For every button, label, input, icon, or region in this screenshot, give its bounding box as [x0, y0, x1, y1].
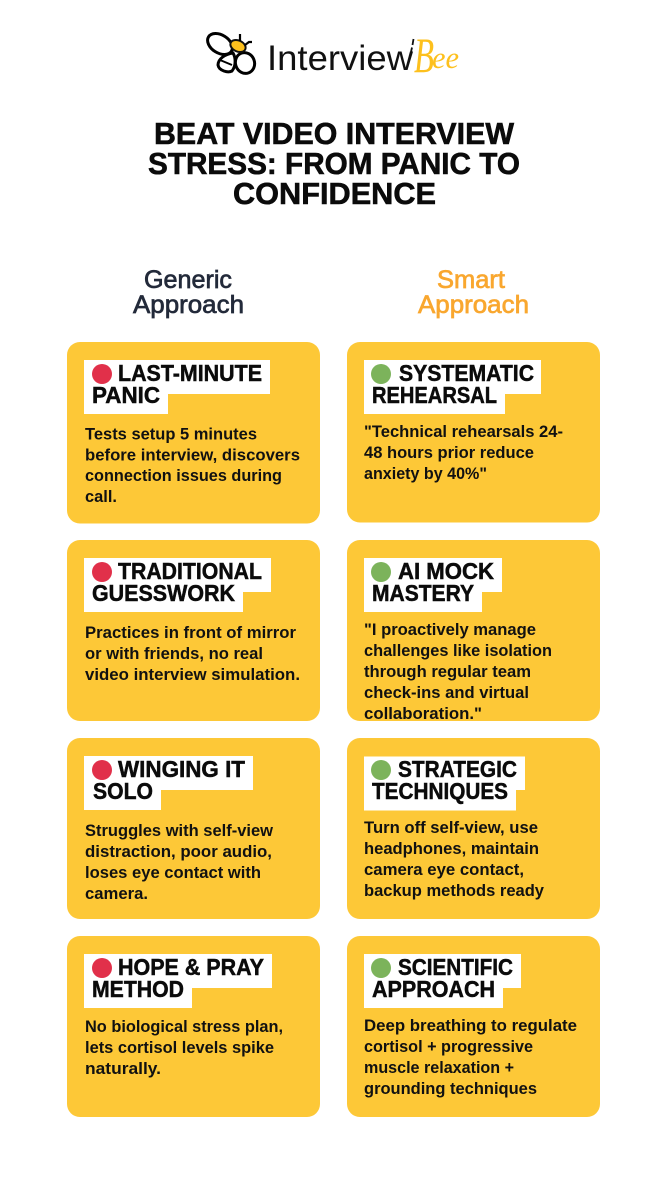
heading: generic approach: Approach	[133, 291, 244, 319]
panel: ai mock mastery: AI MOCK	[398, 558, 494, 584]
panel: hope and pray method: METHOD	[92, 976, 184, 1002]
panel: strategic techniques: backup methods ready	[364, 881, 545, 900]
panel: scientific approach: Deep breathing to regulate	[364, 1016, 577, 1035]
panel: ai mock mastery	[347, 540, 600, 723]
panel: last-minute panic: connection issues during	[85, 466, 282, 485]
panel: winging it solo: Struggles with self-view	[85, 821, 274, 840]
panel: traditional guesswork	[67, 540, 320, 721]
panel: scientific approach: muscle relaxation +	[364, 1058, 514, 1077]
panel: winging it solo	[67, 738, 320, 919]
title: CONFIDENCE	[233, 176, 436, 211]
panel: hope and pray method	[67, 936, 320, 1117]
panel: last-minute panic: LAST-MINUTE	[118, 360, 262, 386]
icon: green dot	[371, 364, 391, 384]
panel: systematic rehearsal: anxiety by 40%"	[364, 464, 487, 483]
wordmark accent: pen nib	[411, 39, 414, 52]
panel: traditional guesswork: or with friends, no real	[85, 644, 263, 663]
panel: winging it solo: SOLO	[93, 778, 153, 804]
wordmark script: B	[414, 27, 434, 83]
panel: hope and pray method: lets cortisol levels spike	[85, 1038, 274, 1057]
panel: strategic techniques: STRATEGIC	[398, 756, 517, 782]
title: STRESS: FROM PANIC TO	[148, 146, 520, 181]
heading: smart approach: Smart	[437, 266, 505, 294]
panel: strategic techniques: Turn off self-view, use	[364, 818, 538, 837]
title: BEAT VIDEO INTERVIEW	[154, 116, 515, 151]
panel: last-minute panic	[67, 342, 320, 524]
panel: ai mock mastery: collaboration."	[364, 704, 482, 723]
panel: strategic techniques: camera eye contact,	[364, 860, 524, 879]
panel: ai mock mastery: check-ins and virtual	[364, 683, 529, 702]
logo: InterviewBee	[204, 27, 459, 83]
panel: strategic techniques: TECHNIQUES	[372, 778, 508, 804]
panel: systematic rehearsal: 48 hours prior reduce	[364, 443, 534, 462]
wordmark: Interview	[267, 39, 414, 78]
heading: generic approach	[133, 266, 244, 319]
icon: green dot	[371, 562, 391, 582]
panel: scientific approach: grounding techniques	[364, 1079, 537, 1098]
icon: red dot	[92, 760, 112, 780]
heading: smart approach: Approach	[418, 291, 529, 319]
icon: green dot	[371, 760, 391, 780]
panel: strategic techniques	[347, 738, 600, 919]
heading: smart approach	[418, 266, 529, 319]
panel: last-minute panic: call.	[85, 487, 117, 506]
panel: traditional guesswork: TRADITIONAL	[118, 558, 262, 584]
panel: hope and pray method: naturally.	[85, 1059, 161, 1078]
panel: systematic rehearsal: "Technical rehearsals 24-	[364, 422, 563, 441]
icon: green dot	[371, 958, 391, 978]
panel: ai mock mastery: challenges like isolation	[364, 641, 552, 660]
panel: traditional guesswork: video interview simulation.	[85, 665, 300, 684]
panel: traditional guesswork: GUESSWORK	[92, 580, 235, 606]
panel: ai mock mastery: "I proactively manage	[364, 620, 536, 639]
panel: scientific approach	[347, 936, 600, 1117]
panel: winging it solo: distraction, poor audio,	[85, 842, 272, 861]
heading: generic approach: Generic	[144, 266, 232, 294]
panel: winging it solo: WINGING IT	[118, 756, 245, 782]
panel: last-minute panic: Tests setup 5 minutes	[85, 424, 257, 444]
panel: last-minute panic: before interview, discovers	[85, 446, 300, 464]
panel: ai mock mastery: through regular team	[364, 662, 531, 681]
panel: systematic rehearsal: REHEARSAL	[372, 382, 497, 408]
wordmark script: ee: ee	[432, 40, 459, 75]
panel: winging it solo: loses eye contact with	[85, 863, 261, 882]
panel: ai mock mastery: MASTERY	[372, 580, 474, 606]
icon: red dot	[92, 958, 112, 978]
icon: red dot	[92, 364, 112, 384]
icon: bee	[204, 29, 258, 76]
panel: winging it solo: camera.	[85, 884, 148, 903]
title	[148, 116, 520, 211]
panel: scientific approach: APPROACH	[372, 976, 495, 1002]
panel: hope and pray method: HOPE & PRAY	[118, 954, 264, 980]
panel: hope and pray method: No biological stress plan,	[85, 1017, 283, 1036]
panel: strategic techniques: headphones, maintain	[364, 839, 539, 858]
panel: scientific approach: cortisol + progressive	[364, 1037, 533, 1056]
panel: systematic rehearsal: SYSTEMATIC	[399, 360, 534, 386]
panel: scientific approach: SCIENTIFIC	[398, 954, 513, 980]
panel: last-minute panic: PANIC	[92, 382, 160, 408]
icon: red dot	[92, 562, 112, 582]
panel: traditional guesswork: Practices in front of mirror	[85, 623, 296, 642]
panel: systematic rehearsal	[347, 342, 600, 522]
